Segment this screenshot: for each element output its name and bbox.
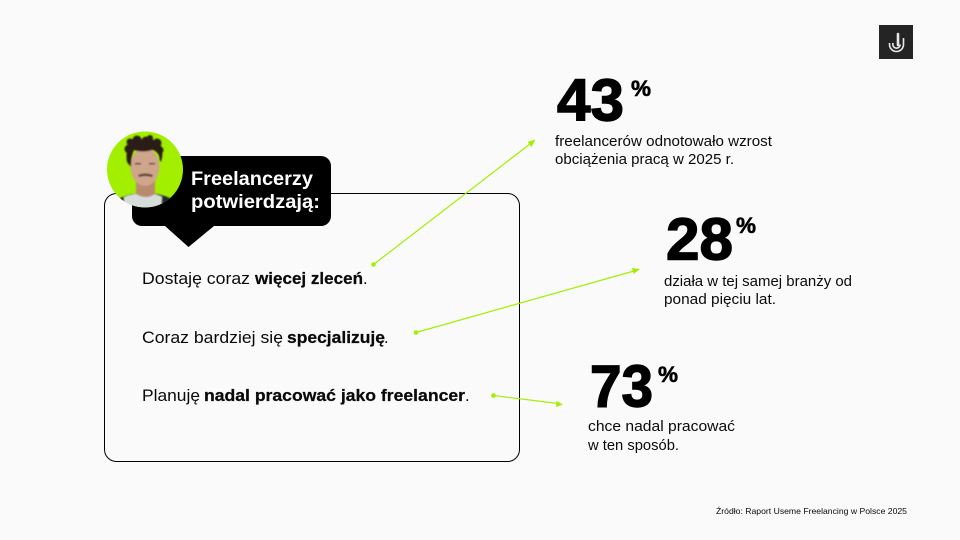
stat: 28%: działa w tej samej branży od — [664, 274, 852, 290]
speech bubble heading: potwierdzają: — [191, 192, 320, 213]
stat: 43%: 43 — [557, 68, 624, 134]
icon: avatar portrait — [107, 132, 183, 210]
stat: 28%: 28 — [666, 206, 733, 272]
statement 3: Planuję — [142, 387, 200, 405]
stat: 73%: 73 — [590, 354, 653, 420]
speech bubble heading — [132, 156, 331, 247]
stat: 28%: % — [736, 213, 756, 238]
statement 1: . — [363, 270, 368, 288]
statement 2 — [142, 329, 389, 347]
icon: logo — [879, 25, 913, 59]
statement 1: więcej zleceń — [254, 270, 363, 288]
arrow: more orders to 43% — [371, 140, 536, 267]
stat: 43% — [555, 68, 772, 168]
stat: 73%: chce nadal pracować — [588, 419, 735, 435]
statement 3: nadal pracować jako freelancer — [204, 387, 466, 405]
arrow: keep freelancing to 73% — [491, 393, 563, 407]
arrow: specialisation to 28% — [414, 268, 640, 335]
panel: statements box — [104, 194, 520, 462]
statement 2: Coraz bardziej się — [142, 329, 283, 347]
stat: 28% — [664, 206, 852, 308]
stat: 43%: obciążenia pracą w 2025 r. — [555, 152, 734, 168]
stat: 28%: ponad pięciu lat. — [664, 292, 776, 308]
statement 3: . — [465, 387, 470, 405]
source note: Źródło: Raport Useme Freelancing w Polsce 2025 — [716, 506, 907, 516]
stat: 43%: % — [631, 76, 651, 101]
stat: 73%: w ten sposób. — [587, 438, 679, 454]
statement 1: Dostaję coraz — [142, 270, 250, 288]
stat: 73%: % — [658, 362, 678, 387]
stat: 73% — [587, 354, 735, 454]
stat: 43%: freelancerów odnotowało wzrost — [555, 134, 772, 150]
statement 2: specjalizuję — [287, 329, 385, 347]
statement 1 — [142, 270, 368, 288]
speech bubble heading: Freelancerzy — [191, 169, 313, 190]
statement 2: . — [384, 329, 389, 347]
